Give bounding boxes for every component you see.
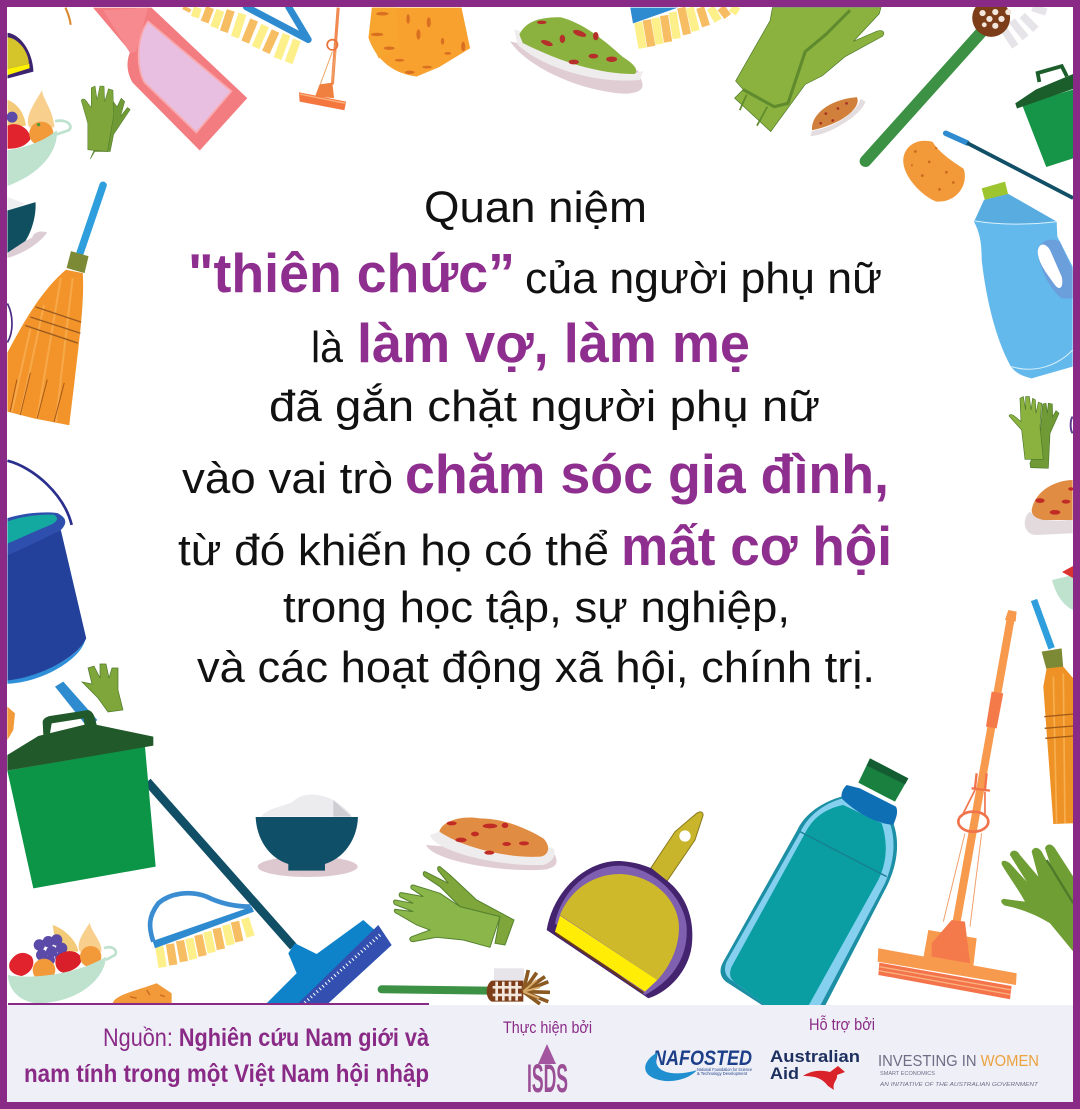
icon: bucket [7, 461, 86, 684]
icons: bottom left group [7, 682, 392, 1003]
icon: rice bowl [256, 795, 358, 877]
icon: half dustpan [8, 33, 33, 79]
icons: right column upper group [974, 182, 1074, 535]
icon: fruit bowl [7, 90, 70, 186]
icon: green bin [1015, 66, 1073, 167]
logo: NAFOSTED: NAFOSTED [653, 1047, 752, 1070]
source text line 1: Nguồn: Nghiên cứu Nam giới và [103, 1024, 429, 1052]
logo: Australian Aid: Aid [770, 1064, 799, 1083]
icon: blue yellow brush [150, 893, 254, 967]
line 8: và các hoạt động xã hội, chính trị. [197, 643, 875, 692]
icon: dark bowl [7, 197, 47, 258]
icon: orange mop [878, 610, 1017, 999]
icon: broom [1034, 600, 1073, 824]
line 1: Quan niệm [424, 183, 647, 232]
main statement text [178, 183, 892, 692]
line 6 lead: từ đó khiến họ có thể [178, 526, 609, 575]
icon: orange sponge [369, 8, 470, 76]
icon: blue yellow brush [630, 8, 738, 48]
icon: plate of food [426, 817, 557, 870]
footer panel: ISDS [527, 1057, 568, 1101]
icon: yellow sponge [903, 141, 965, 202]
icons: top right group [510, 0, 1073, 202]
icon: green gloves [81, 86, 130, 159]
icons: bottom centre group [382, 812, 703, 1004]
line 6 highlight: mất cơ hội [621, 515, 892, 577]
label: implemented by: Thực hiện bởi [503, 1018, 592, 1037]
icon: teal plastic bottle [721, 758, 908, 1006]
icon: small orange mop [299, 8, 346, 110]
icon: purple edge scrap [1071, 417, 1073, 433]
logo: Australian Aid: Australian [770, 1047, 860, 1066]
logo: Investing in Women: AN INITIATIVE OF THE AUSTRALIAN GOVERNMENT [879, 1082, 1039, 1088]
icon: pink cleaning bottle [93, 8, 247, 151]
icon: green bin [7, 710, 156, 888]
icons: bottom right group [721, 600, 1073, 1006]
line 5 highlight: chăm sóc gia đình, [405, 443, 889, 505]
icon: green gloves [394, 867, 514, 947]
line 4: đã gắn chặt người phụ nữ [269, 382, 820, 431]
logo: Investing in Women [878, 1053, 1039, 1088]
icon: fruit bowl [8, 923, 116, 1003]
logo: Investing in Women: INVESTING IN WOMEN [878, 1053, 1039, 1070]
logo: Australian Aid [770, 1047, 860, 1090]
line 3 lead: là [311, 323, 343, 372]
footer panel [7, 1003, 1073, 1103]
icon: small fruit bowl right [1052, 566, 1073, 610]
logo: NAFOSTED [645, 1047, 752, 1081]
icon: dustpan [547, 812, 703, 998]
icon: green gloves [1001, 845, 1073, 952]
icon: large green gloves [735, 8, 884, 132]
icons: left column group [7, 185, 103, 684]
icon: bottle brush [382, 968, 550, 1004]
icon: yellow brush [186, 7, 308, 63]
line 2 highlight: "thiên chức” [188, 242, 515, 304]
line 7: trong học tập, sự nghiệp, [283, 583, 790, 632]
icon: green dish brush [865, 0, 1046, 161]
line 5 lead: vào vai trò [182, 454, 393, 503]
icon: gloves [1009, 397, 1059, 468]
icon: gloves small left [82, 664, 123, 712]
icon: orange sponge [113, 983, 172, 1003]
icon: blue detergent bottle [974, 182, 1073, 378]
icon: broom [7, 185, 103, 425]
logo: Investing in Women: SMART ECONOMICS [880, 1071, 935, 1077]
source text line 2: nam tính trong một Việt Nam hội nhập [24, 1060, 429, 1088]
icons: top left group [7, 7, 470, 186]
icon: purple edge arc [7, 304, 12, 342]
logo: NAFOSTED: National Foundation for Science [697, 1067, 752, 1072]
icon: salad plate [510, 17, 643, 94]
icon: teal push broom [147, 782, 392, 1003]
logo: ISDS [527, 1044, 568, 1101]
line 3 highlight: làm vợ, làm mẹ [357, 312, 750, 374]
icon: food plate [1025, 480, 1074, 535]
icon: small orange arc [65, 8, 71, 25]
icon: small food plate [810, 97, 865, 136]
icon: orange edge sponge [7, 707, 15, 740]
logo: NAFOSTED: & Technology Development [697, 1071, 748, 1076]
label: supported by: Hỗ trợ bởi [809, 1015, 875, 1034]
icon: long stick [946, 133, 1073, 198]
line 2 rest: của người phụ nữ [525, 254, 882, 303]
icon: blue handle [55, 682, 97, 728]
